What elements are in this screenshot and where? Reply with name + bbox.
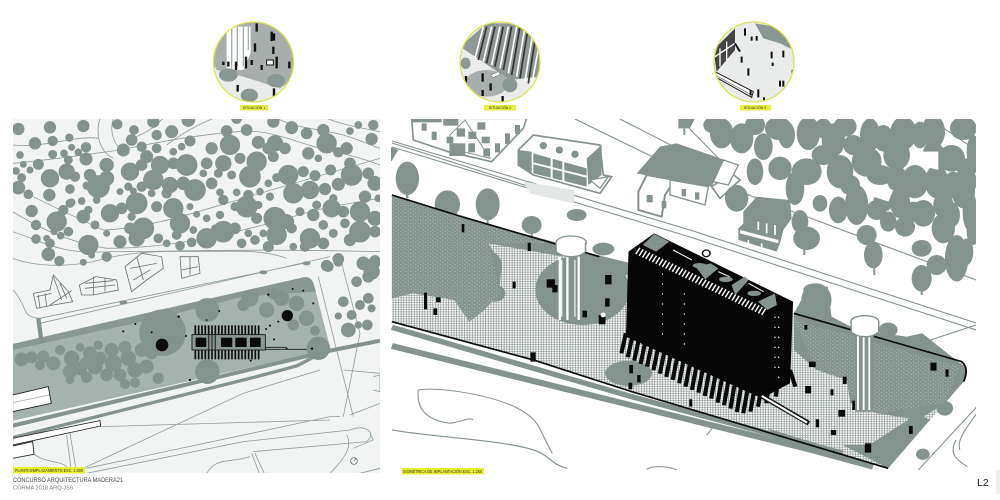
sheet tab xyxy=(996,470,1000,494)
trees west xyxy=(396,162,614,255)
north arrow xyxy=(351,458,357,464)
people dots xyxy=(122,288,314,381)
black round voids xyxy=(156,339,168,351)
project reference: CORMA 2018 ARQ-356 xyxy=(13,486,73,492)
label: situación 1 xyxy=(240,105,268,110)
house 3, garage and upper tree mass xyxy=(637,115,980,297)
water tower east xyxy=(851,316,879,412)
label: situación 3 xyxy=(740,105,771,110)
tree mass east xyxy=(794,287,966,420)
tree canopy field xyxy=(12,114,382,279)
water tower west xyxy=(556,236,586,320)
inset circle: situación 1 xyxy=(212,20,297,107)
houses xyxy=(390,118,614,255)
park black border xyxy=(392,195,966,468)
label: situación 2 xyxy=(484,105,516,110)
label: situación 2: SITUACIÓN 2 xyxy=(489,105,511,110)
project title: CONCURSO ARQUITECTURA MADERA21 xyxy=(13,477,123,484)
lower road bands xyxy=(392,327,873,467)
platforms left xyxy=(13,387,101,458)
park trees xyxy=(16,288,319,388)
road and lot outlines xyxy=(13,257,380,475)
people xyxy=(424,224,949,453)
road lines xyxy=(392,119,976,350)
contour lines south xyxy=(392,389,977,470)
panel: isometric view xyxy=(390,115,980,477)
contour lines xyxy=(13,118,380,265)
lower corner xyxy=(843,413,930,468)
driveway hatch xyxy=(523,182,575,203)
label: situación 1: SITUACIÓN 1 xyxy=(243,105,265,110)
main timber building xyxy=(621,233,795,413)
park with hatched paving xyxy=(392,195,977,470)
house 1 xyxy=(412,118,527,162)
houses xyxy=(33,253,200,308)
house 2 xyxy=(518,135,612,193)
caption: site plan: PLANTA EMPLAZAMIENTO ESC. 1:500 xyxy=(15,468,84,473)
inset circle: situación 3 xyxy=(713,20,797,103)
lower site: park, roads, buildings xyxy=(13,253,380,475)
east side trees xyxy=(119,257,380,337)
label: situación 3: SITUACIÓN 3 xyxy=(744,105,766,110)
park ground xyxy=(13,277,331,421)
pedestrian bridge xyxy=(265,347,307,349)
plaza circles xyxy=(139,309,186,356)
access ramp xyxy=(760,395,809,423)
panel: site plan xyxy=(12,114,382,475)
inset circle: situación 2 xyxy=(459,21,541,103)
caption: site plan xyxy=(13,467,85,474)
sheet number: L2 xyxy=(977,477,989,489)
park edge bands xyxy=(13,277,316,350)
building plan with columns xyxy=(192,325,265,359)
tree mass west xyxy=(392,195,966,468)
caption: isometric view: ISOMÉTRICA DE IMPLANTACIÓN ESC. 1:250 xyxy=(403,469,483,474)
